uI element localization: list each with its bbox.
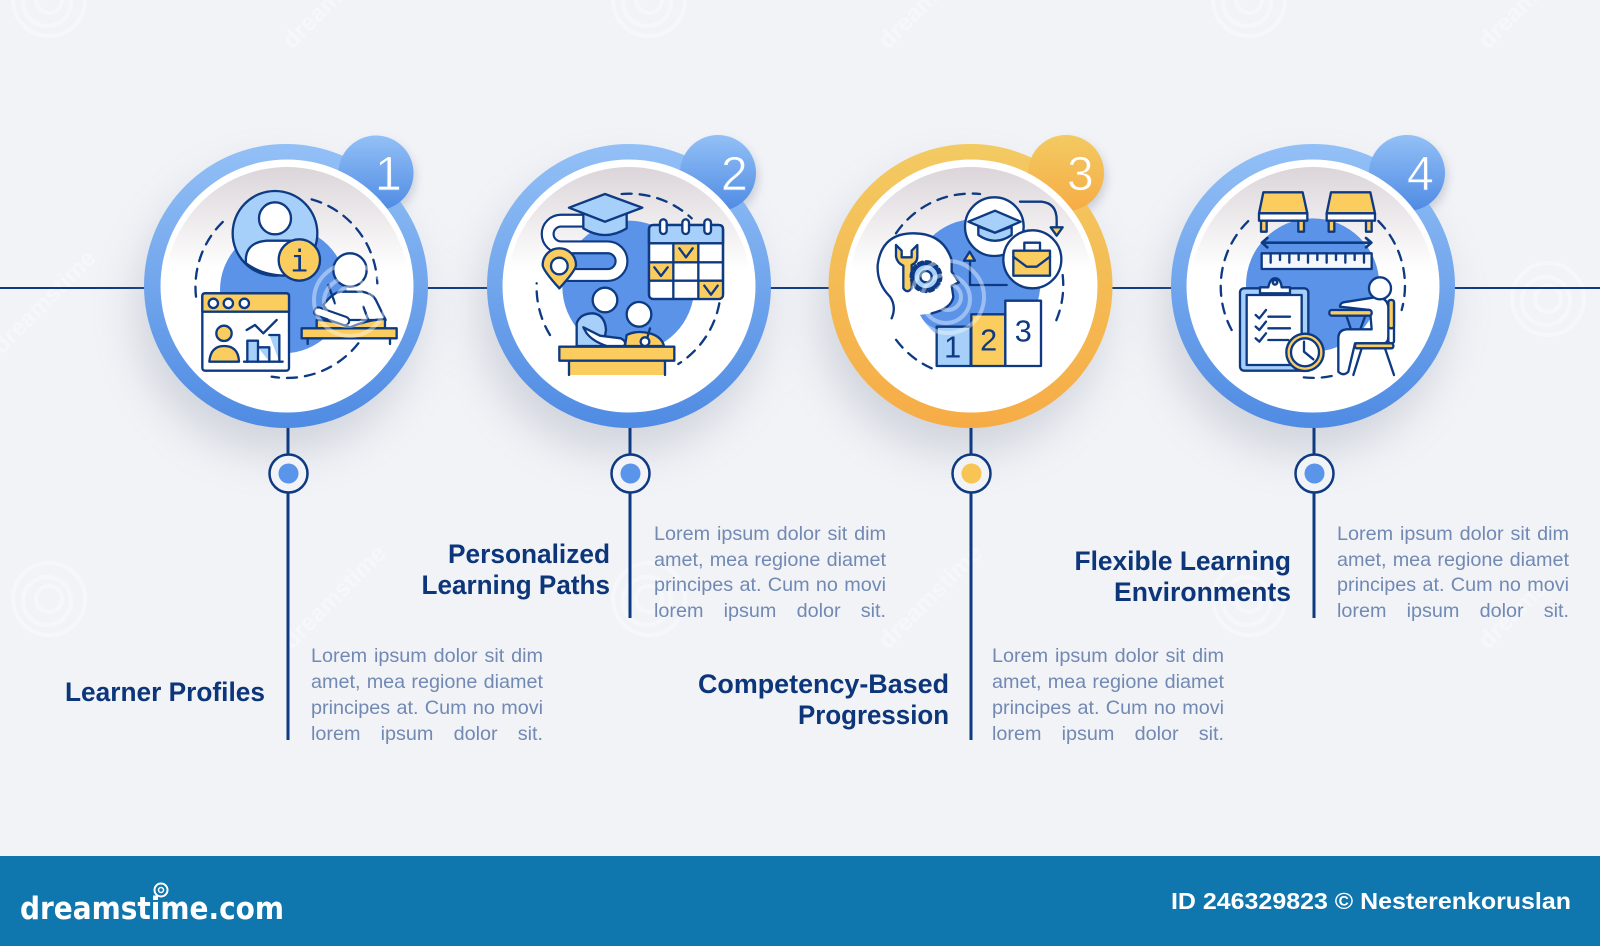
icon: competency-based progression bbox=[878, 194, 1063, 368]
body text 3 bbox=[992, 645, 1224, 745]
icon: learner profiles: i bbox=[290, 244, 309, 279]
watermark swirls: dreams bbox=[1473, 575, 1553, 654]
horizontal timeline line bbox=[0, 287, 1600, 289]
circle 4 bbox=[1171, 135, 1455, 428]
body text 2: principes at. Cum no movi bbox=[654, 574, 886, 596]
number 4: 4 bbox=[1407, 148, 1434, 201]
heading: flexible learning environments: Environments bbox=[1114, 577, 1291, 607]
icon: flexible learning environments bbox=[1221, 192, 1405, 378]
watermark swirls: dreamstime bbox=[873, 540, 988, 654]
heading: flexible learning environments: Flexible Learning bbox=[1074, 546, 1291, 576]
heading: personalized learning paths: Learning Paths bbox=[422, 570, 610, 600]
body text 2: amet, mea regione diamet bbox=[654, 549, 886, 571]
icon: personalized learning paths bbox=[537, 194, 723, 375]
body text 4 bbox=[1337, 523, 1569, 622]
body text 1: Lorem ipsum dolor sit dim bbox=[311, 645, 543, 667]
body text 4: Lorem ipsum dolor sit dim bbox=[1337, 523, 1569, 545]
node 2 bbox=[612, 454, 650, 492]
body text 3: lorem ipsum dolor sit. bbox=[992, 723, 1224, 745]
body text 1: lorem ipsum dolor sit. bbox=[311, 723, 543, 745]
node 4 bbox=[1296, 454, 1334, 492]
body text 1: amet, mea regione diamet bbox=[311, 671, 543, 693]
icon: competency-based progression: 3 bbox=[1015, 315, 1032, 349]
heading: personalized learning paths bbox=[422, 539, 610, 600]
body text 3: Lorem ipsum dolor sit dim bbox=[992, 645, 1224, 667]
vertical connector lines bbox=[288, 420, 1314, 740]
footer bar bbox=[0, 856, 1600, 946]
number 1: 1 bbox=[375, 148, 402, 201]
watermark swirls: dreamstime bbox=[277, 540, 392, 654]
number 3: 3 bbox=[1067, 148, 1094, 201]
body text 2: Lorem ipsum dolor sit dim bbox=[654, 523, 886, 545]
body text 3: amet, mea regione diamet bbox=[992, 671, 1224, 693]
number 2: 2 bbox=[721, 148, 748, 201]
body text 1: principes at. Cum no movi bbox=[311, 697, 543, 719]
heading: learner profiles: Learner Profiles bbox=[65, 677, 265, 707]
icon: competency-based progression: 2 bbox=[980, 324, 997, 358]
body text 4: principes at. Cum no movi bbox=[1337, 574, 1569, 596]
circle 1 bbox=[144, 136, 428, 428]
heading: flexible learning environments bbox=[1074, 546, 1291, 607]
body text 1 bbox=[311, 645, 543, 745]
node 1 bbox=[270, 454, 308, 492]
body text 2 bbox=[654, 523, 886, 622]
watermark swirls bbox=[0, 0, 1584, 654]
footer logo: dreamstime.com bbox=[20, 891, 284, 927]
body text 2: lorem ipsum dolor sit. bbox=[654, 600, 886, 622]
watermark swirls over icons bbox=[314, 261, 984, 336]
drop shadows bbox=[136, 170, 1447, 454]
heading: competency-based progression: Progression bbox=[798, 700, 949, 730]
heading: personalized learning paths: Personalized bbox=[448, 539, 610, 569]
heading: competency-based progression bbox=[698, 669, 949, 730]
circle 2 bbox=[487, 135, 771, 428]
heading: competency-based progression: Competency-Based bbox=[698, 669, 949, 699]
icon: learner profiles bbox=[195, 191, 397, 378]
node 3 bbox=[952, 454, 990, 492]
circle 3 bbox=[828, 135, 1112, 428]
body text 4: amet, mea regione diamet bbox=[1337, 549, 1569, 571]
footer credit: ID 246329823 © Nesterenkoruslan bbox=[1171, 888, 1571, 914]
icon: competency-based progression: 1 bbox=[944, 330, 961, 364]
body text 4: lorem ipsum dolor sit. bbox=[1337, 600, 1569, 622]
body text 3: principes at. Cum no movi bbox=[992, 697, 1224, 719]
